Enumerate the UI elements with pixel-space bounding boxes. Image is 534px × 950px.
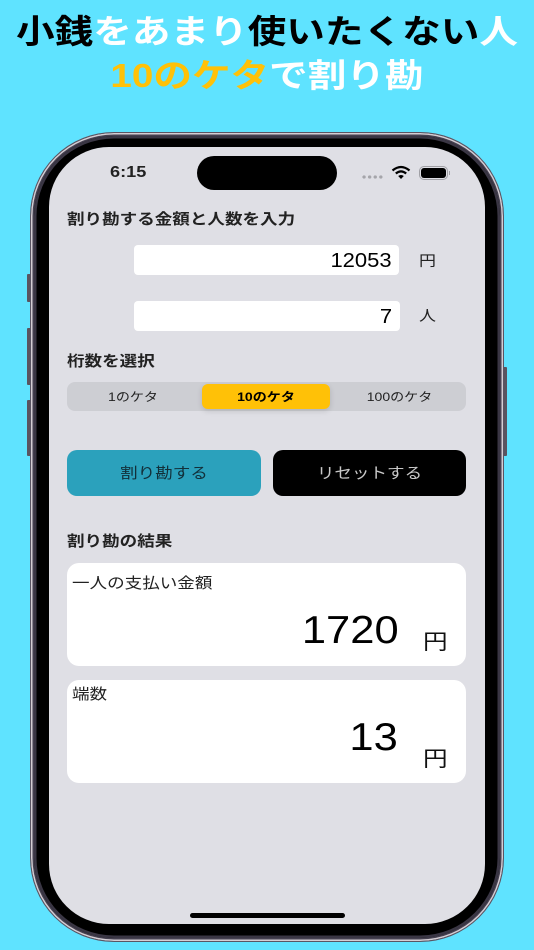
segment: 100: 100のケタ [367, 390, 432, 404]
icon: battery [419, 166, 448, 180]
card: payment [67, 563, 466, 666]
input: amount [134, 245, 399, 275]
split label: 割り勘する [120, 465, 208, 482]
heading: input: 割り勘する金額と人数を入力 [67, 211, 295, 228]
input: people [134, 301, 400, 331]
button: split [67, 450, 261, 496]
unit: yen: 円 [419, 254, 436, 270]
side buttons [27, 274, 507, 456]
phone frame [30, 132, 504, 942]
button: reset [273, 450, 466, 496]
payment value: 1720 [302, 609, 399, 652]
dynamic island [197, 156, 337, 190]
title line 1: 小銭をあまり使いたくない人 [16, 13, 518, 50]
people value: 7 [380, 306, 392, 328]
reset label: リセットする [317, 465, 422, 482]
heading: digits: 桁数を選択 [67, 353, 155, 370]
phone screen [49, 147, 485, 924]
remainder unit: 円 [423, 748, 448, 771]
signal dots [362, 175, 384, 179]
status bar [110, 156, 450, 190]
time: 6:15 [110, 164, 146, 180]
title [16, 13, 518, 94]
phone mockup [27, 132, 507, 942]
card: remainder [67, 680, 466, 783]
unit: people: 人 [419, 309, 436, 325]
title line 2: 10のケタで割り勘 [110, 57, 424, 94]
remainder value: 13 [350, 716, 398, 759]
segment: 10 selected [202, 384, 330, 409]
amount value: 12053 [331, 250, 392, 272]
remainder label: 端数 [72, 686, 107, 703]
segmented control [67, 382, 466, 411]
home indicator [190, 913, 345, 918]
payment unit: 円 [423, 631, 448, 654]
segment: 10 selected: 10のケタ [237, 390, 295, 404]
icon: wifi [392, 166, 410, 179]
heading: result: 割り勘の結果 [67, 533, 172, 550]
payment label: 一人の支払い金額 [72, 575, 212, 592]
segment: 1: 1のケタ [108, 390, 158, 404]
